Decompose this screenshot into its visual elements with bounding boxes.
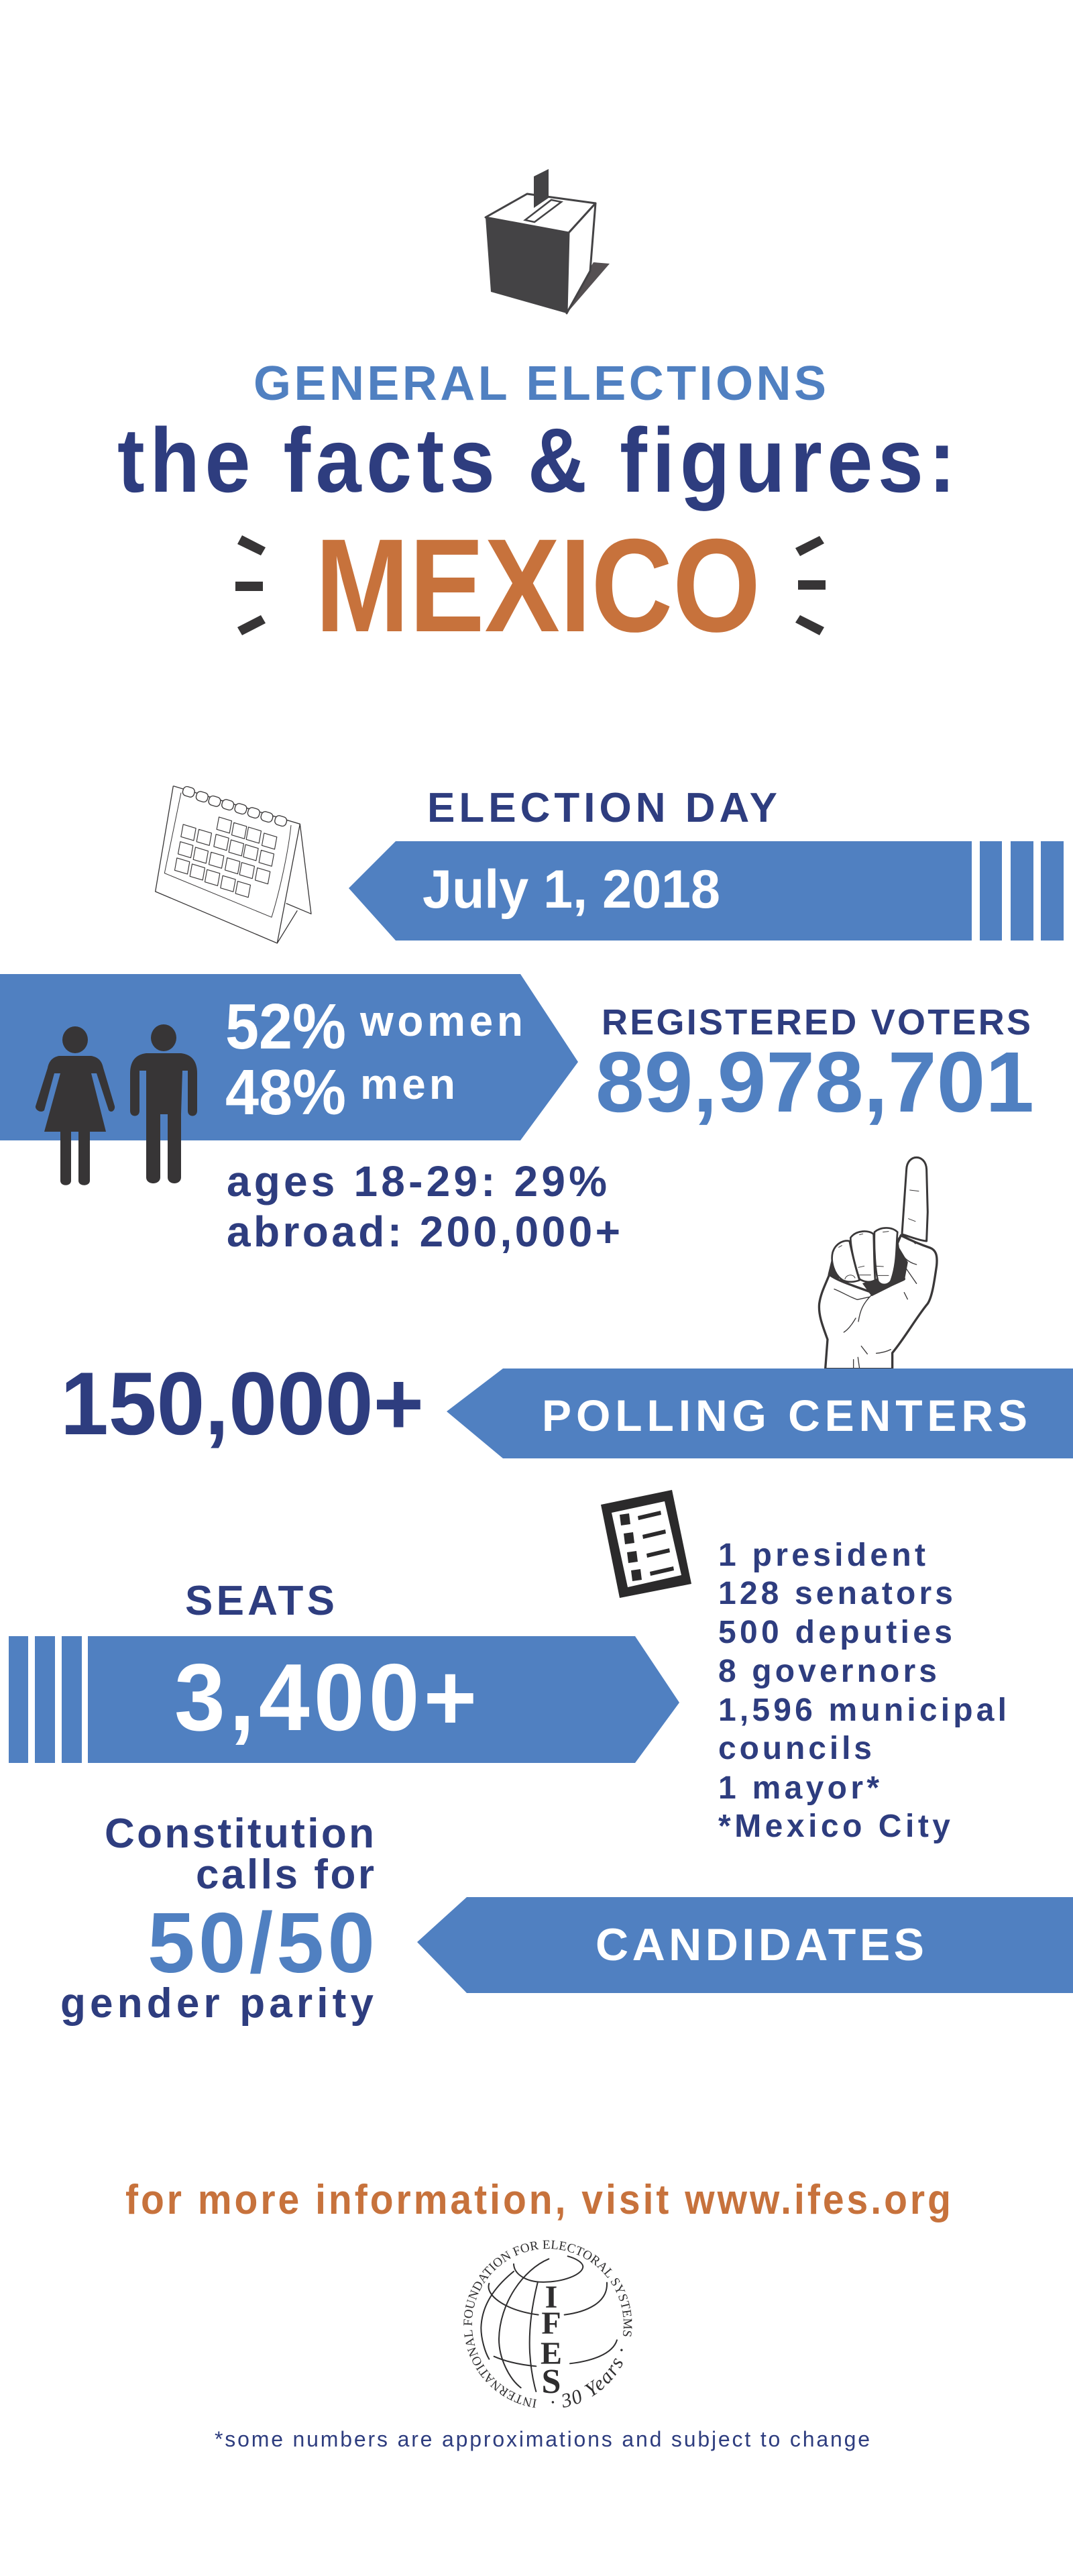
text: footnote: *some numbers are approximations and subject to change xyxy=(215,2427,870,2451)
text: abroad voters: abroad: 200,000+ xyxy=(227,1208,620,1256)
panel: voter gender split xyxy=(0,974,578,1140)
banner: election date: July 1, 2018 xyxy=(422,859,720,920)
banner: seats total: 3,400+ xyxy=(174,1644,477,1751)
panel: voter gender split: 48% xyxy=(225,1057,346,1128)
text: seats list: 128 senators xyxy=(718,1576,953,1611)
text: seats list: 1 president xyxy=(718,1538,925,1573)
icon: right emphasis ticks xyxy=(795,536,826,635)
icon: man figure xyxy=(130,1024,197,1183)
stat: registered voters number: 89,978,701 xyxy=(596,1034,1034,1130)
banner: candidates xyxy=(417,1897,1073,1993)
text: seats list xyxy=(718,1538,1007,1844)
text: seats list: 500 deputies xyxy=(718,1615,952,1650)
icon: desk calendar xyxy=(156,786,311,943)
logo: IFES: F xyxy=(541,2306,561,2341)
title: Mexico: MEXICO xyxy=(315,511,760,659)
logo globe lines xyxy=(481,2256,617,2392)
text: seats list: 1 mayor* xyxy=(718,1770,879,1806)
logo: IFES: E xyxy=(541,2336,562,2371)
text: seats list: 8 governors xyxy=(718,1654,937,1689)
text: constitution calls for: Constitution xyxy=(105,1811,374,1857)
heading: seats: SEATS xyxy=(185,1578,335,1624)
stat: polling centers number: 150,000+ xyxy=(60,1354,424,1454)
panel: voter gender split: men xyxy=(360,1060,455,1108)
banner: polling centers: POLLING CENTERS xyxy=(542,1391,1027,1440)
logo: IFES: S xyxy=(542,2363,561,2401)
text: seats list: councils xyxy=(718,1731,872,1766)
text: constitution calls for: calls for xyxy=(196,1851,374,1898)
icon: ballot box xyxy=(486,169,610,313)
heading: election day: ELECTION DAY xyxy=(427,785,777,831)
heading: registered voters: REGISTERED VOTERS xyxy=(602,1002,1031,1042)
logo: IFES: INTERNATIONAL FOUNDATION FOR ELECTORAL SYSTEMS xyxy=(463,2241,632,2408)
logo: IFES: I xyxy=(545,2279,557,2315)
text: constitution calls for xyxy=(105,1811,374,1898)
title: the facts and figures: the facts & figures: xyxy=(117,410,956,511)
text: seats list: 1,596 municipal xyxy=(718,1693,1007,1728)
text: age breakdown: ages 18-29: 29% xyxy=(227,1157,607,1205)
stat: 50/50 parity: 50/50 xyxy=(148,1895,375,1990)
banner: seats total xyxy=(9,1636,679,1763)
banner: candidates: CANDIDATES xyxy=(596,1919,924,1970)
icon: raised finger hand xyxy=(819,1157,937,1369)
text: more information link: for more information, visit www.ifes.org xyxy=(125,2176,951,2223)
text: gender parity: gender parity xyxy=(60,1980,374,2027)
text: seats list: *Mexico City xyxy=(718,1809,950,1844)
logo: IFES: · 30 Years · xyxy=(551,2349,623,2408)
panel: voter gender split: 52% xyxy=(225,991,346,1063)
heading: general elections: GENERAL ELECTIONS xyxy=(253,357,826,411)
icon: left emphasis ticks xyxy=(235,535,266,635)
banner: election date xyxy=(349,841,1064,941)
icon: woman figure xyxy=(36,1026,115,1185)
panel: voter gender split: women xyxy=(359,997,523,1045)
banner: polling centers xyxy=(447,1368,1073,1458)
icon: ballot paper xyxy=(601,1490,691,1598)
